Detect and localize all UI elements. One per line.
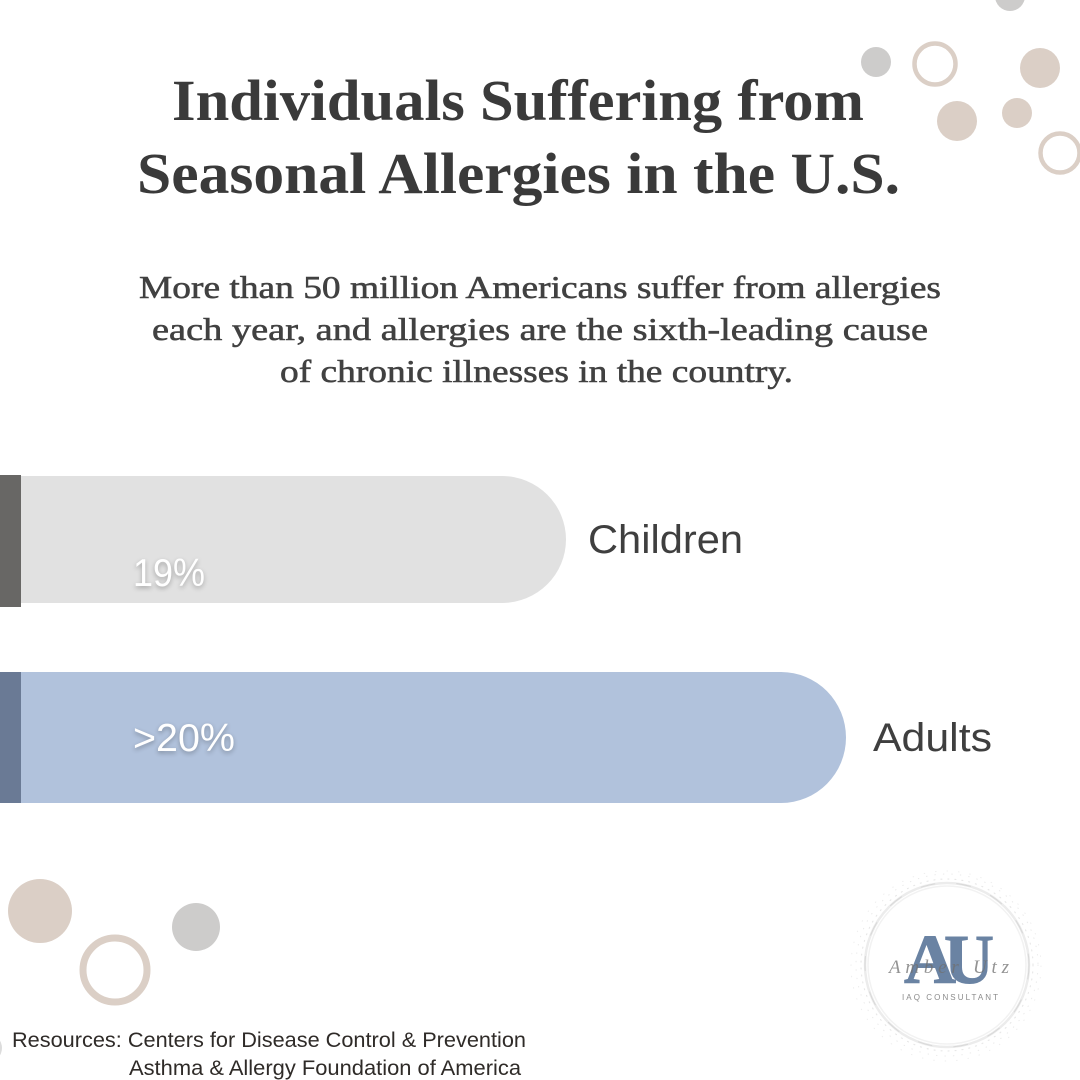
decorative circles: top right	[861, 0, 1080, 172]
intro text: each year, and allergies are the sixth-leading cause	[152, 311, 928, 347]
title	[137, 68, 900, 206]
label: Children: Children	[588, 518, 743, 562]
value: >20%: >20%	[133, 717, 235, 760]
value: 19%: 19%	[133, 552, 205, 595]
title: Individuals Suffering from	[172, 68, 864, 133]
logo: AU IAQ Consultant	[851, 871, 1041, 1061]
bar: children 19%	[0, 475, 566, 607]
title: Seasonal Allergies in the U.S.	[137, 141, 900, 206]
intro text	[139, 269, 941, 389]
logo speckle ring	[851, 871, 1041, 1061]
logo signature: Amber Utz	[887, 957, 1010, 978]
decorative circles: bottom left	[0, 879, 220, 1062]
logo tagline: IAQ CONSULTANT	[902, 993, 998, 1002]
logo letters AU: U	[944, 922, 994, 999]
logo letters AU: A	[904, 922, 956, 999]
resources text: Resources: Centers for Disease Control & Prevention	[12, 1029, 526, 1052]
intro text: of chronic illnesses in the country.	[280, 353, 793, 389]
resources text	[12, 1029, 526, 1080]
logo letters AU	[904, 922, 994, 999]
intro text: More than 50 million Americans suffer from allergies	[139, 269, 941, 305]
bar: adults >20%	[0, 672, 846, 803]
resources text: Asthma & Allergy Foundation of America	[129, 1057, 521, 1080]
label: Adults: Adults	[873, 716, 992, 760]
